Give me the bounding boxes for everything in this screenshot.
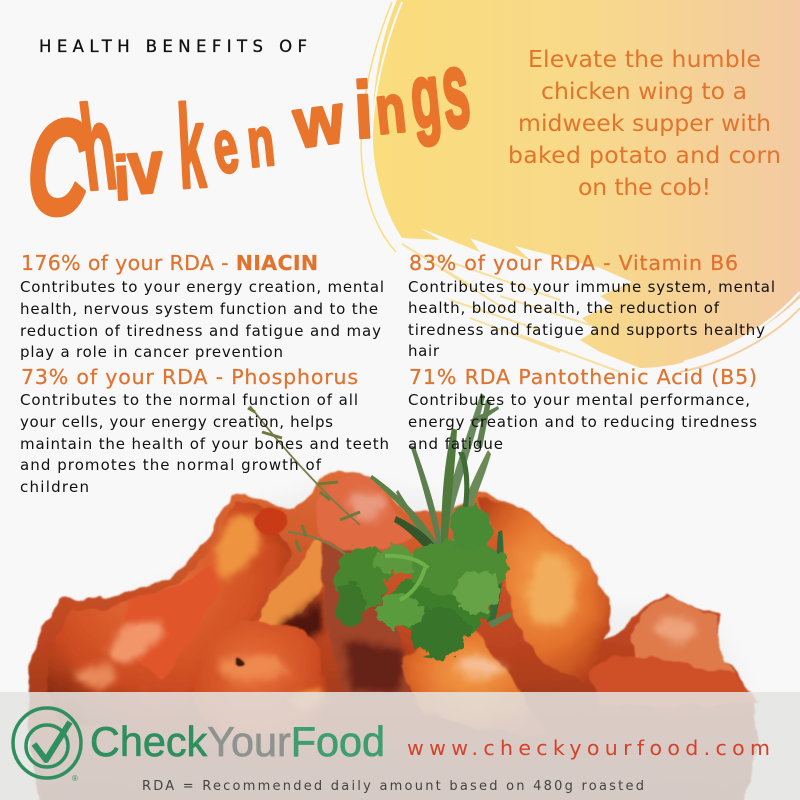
benefit: niacin: play a role in cancer prevention bbox=[20, 343, 283, 361]
title: Chivken wings: i bbox=[112, 143, 132, 213]
tagline: Elevate the humble bbox=[528, 45, 761, 73]
title: Chivken wings: w bbox=[288, 80, 349, 164]
footer band bbox=[0, 692, 800, 800]
benefit: niacin: Contributes to your energy creation, mental bbox=[20, 278, 384, 296]
benefit: phosphorus: Contributes to the normal function of all bbox=[20, 391, 358, 409]
benefit: pantothenic acid: Contributes to your mental performance, bbox=[408, 391, 750, 409]
benefit: pantothenic acid: energy creation and to reducing tiredness bbox=[408, 413, 757, 431]
title: Chivken wings: n bbox=[243, 102, 278, 183]
far right piece bbox=[628, 597, 735, 672]
title: Chivken wings: h bbox=[74, 79, 123, 216]
herbs bbox=[248, 393, 512, 658]
centre piece bbox=[318, 476, 412, 555]
benefit: vitamin b6: hair bbox=[408, 342, 440, 360]
logo bbox=[13, 708, 385, 783]
left wing bbox=[48, 500, 290, 725]
benefit: phosphorus: your cells, your energy creation, helps bbox=[20, 413, 333, 431]
title: Chivken wings bbox=[25, 27, 475, 245]
title: Chivken wings: i bbox=[352, 65, 375, 156]
right wing bbox=[478, 499, 608, 680]
tagline: chicken wing to a bbox=[541, 77, 747, 105]
benefit: phosphorus: and promotes the normal growth of bbox=[20, 456, 322, 474]
title: Chivken wings: k bbox=[174, 81, 209, 214]
parsley stems bbox=[385, 556, 428, 600]
tagline bbox=[508, 45, 781, 201]
logo wordmark: CheckYourFood bbox=[90, 718, 385, 765]
footnote: RDA = Recommended daily amount based on 480g roasted bbox=[142, 779, 644, 794]
round drumstick bbox=[194, 620, 330, 756]
benefit: pantothenic acid bbox=[408, 365, 757, 453]
title: Chivken wings: s bbox=[436, 27, 475, 151]
title: Chivken wings: g bbox=[406, 45, 445, 148]
title: Chivken wings: C bbox=[25, 91, 94, 245]
benefit: vitamin b6: health, blood health, the reduction of bbox=[408, 299, 720, 317]
tagline: on the cob! bbox=[578, 173, 711, 201]
benefit: pantothenic acid: and fatigue bbox=[408, 435, 503, 453]
benefit: vitamin b6: 83% of your RDA - Vitamin B6 bbox=[409, 251, 738, 275]
benefit: niacin: reduction of tiredness and fatigue and may bbox=[20, 322, 381, 340]
benefit: vitamin b6 bbox=[408, 251, 775, 360]
website: www.checkyourfood.com bbox=[407, 736, 770, 760]
food photo: chicken wings bbox=[28, 472, 757, 800]
tagline: baked potato and corn bbox=[508, 141, 781, 169]
benefit: vitamin b6: Contributes to your immune system, mental bbox=[408, 278, 775, 296]
benefit: phosphorus: children bbox=[20, 478, 89, 496]
thyme sprig bbox=[248, 406, 360, 558]
benefit: phosphorus: maintain the health of your bones and teeth bbox=[20, 435, 389, 453]
rosemary bbox=[370, 393, 512, 628]
logo registered mark: ® bbox=[72, 774, 78, 783]
benefit: niacin: health, nervous system function and to the bbox=[20, 300, 378, 318]
logo mark bbox=[13, 708, 81, 778]
benefit: phosphorus bbox=[20, 365, 389, 496]
wing silhouette bbox=[28, 472, 757, 800]
benefit: niacin: 176% of your RDA - NIACIN bbox=[21, 251, 318, 275]
title: Chivken wings: e bbox=[206, 103, 244, 191]
kicker heading: HEALTH BENEFITS OF bbox=[39, 37, 307, 56]
brush circle bbox=[361, 0, 800, 372]
tagline: midweek supper with bbox=[518, 109, 771, 137]
benefit: pantothenic acid: 71% RDA Pantothenic Acid (B5) bbox=[409, 365, 757, 389]
benefit: niacin bbox=[20, 251, 384, 361]
benefit: phosphorus: 73% of your RDA - Phosphorus bbox=[21, 365, 358, 389]
parsley bbox=[335, 504, 508, 658]
title: Chivken wings: n bbox=[372, 69, 409, 149]
title: Chivken wings: v bbox=[125, 125, 166, 210]
benefit: vitamin b6: tiredness and fatigue and supports healthy bbox=[408, 321, 765, 339]
